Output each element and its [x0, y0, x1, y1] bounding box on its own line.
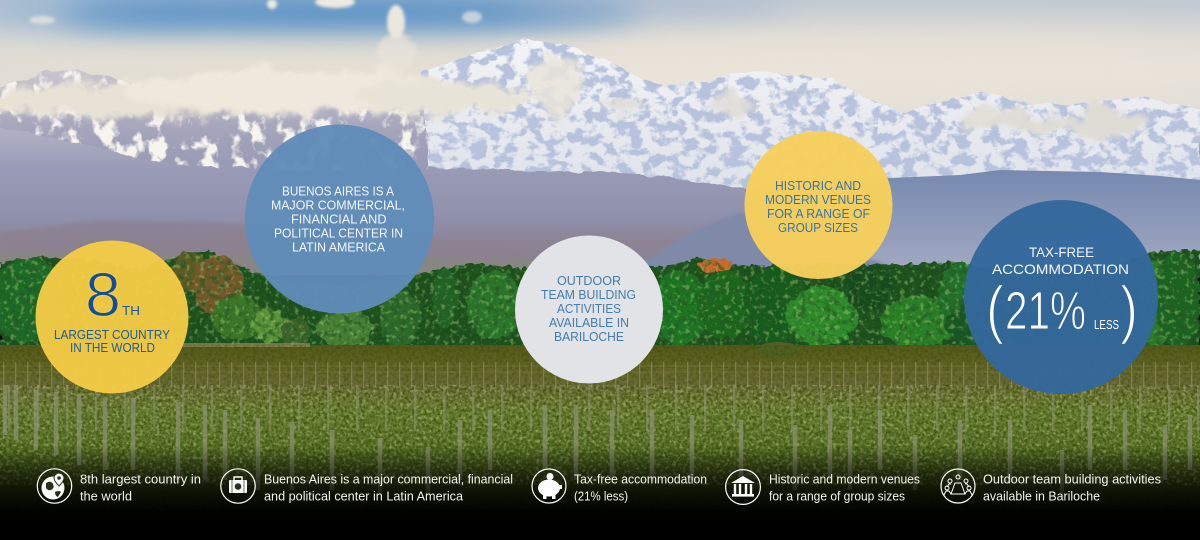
- caption: POLITICAL CENTER IN: [274, 226, 403, 240]
- caption: ACTIVITIES: [557, 302, 621, 316]
- circle: outdoor team building: [515, 236, 663, 384]
- label: Tax-free accommodation: [574, 472, 707, 486]
- 21% less figure: (: [986, 273, 1004, 345]
- label: for a range of group sizes: [769, 490, 905, 504]
- icon: piggy bank: [532, 469, 566, 503]
- caption: HISTORIC AND: [775, 179, 861, 193]
- caption: [271, 184, 405, 254]
- caption: LARGEST COUNTRY: [54, 328, 171, 342]
- label: [80, 472, 201, 504]
- 21% less figure: ): [1120, 273, 1138, 345]
- blue foothills: [640, 170, 1200, 270]
- caption: ACCOMMODATION: [992, 261, 1129, 277]
- caption: AVAILABLE IN: [549, 316, 629, 330]
- caption: [992, 244, 1129, 277]
- caption: TEAM BUILDING: [541, 288, 636, 302]
- main massif: [420, 38, 1200, 190]
- caption: TAX-FREE: [1029, 244, 1094, 260]
- feature: outdoor team building: [941, 469, 1161, 504]
- icon: team around a table: [941, 469, 975, 503]
- 21% less figure: LESS: [1094, 318, 1119, 332]
- icon: classical building: [726, 470, 760, 504]
- feature: Buenos Aires: [221, 469, 513, 504]
- caption: [54, 328, 171, 355]
- label: (21% less): [574, 490, 628, 504]
- feature: 8th largest country: [37, 469, 201, 504]
- label: available in Bariloche: [983, 490, 1100, 504]
- icon: globe with pin: [37, 469, 72, 503]
- label: and political center in Latin America: [264, 490, 463, 504]
- leaf texture: [0, 345, 1200, 510]
- icon: money suitcase: [221, 469, 255, 503]
- far mountain range: [0, 120, 1200, 275]
- label: [574, 472, 707, 504]
- snow-covered peaks: [0, 38, 1200, 190]
- label: 8th largest country in: [80, 472, 201, 486]
- label: Outdoor team building activities: [983, 472, 1161, 486]
- feature strip: [37, 469, 1161, 504]
- clouds over the peaks: [0, 34, 1152, 138]
- big number 8th: [85, 261, 140, 330]
- caption: FINANCIAL AND: [291, 212, 386, 226]
- caption: BARILOCHE: [554, 330, 624, 344]
- label: the world: [80, 490, 132, 504]
- feature: tax-free: [532, 469, 707, 504]
- caption: [765, 179, 871, 235]
- caption: MODERN VENUES: [765, 193, 871, 207]
- caption: GROUP SIZES: [778, 221, 858, 235]
- label: [769, 472, 920, 504]
- label: [264, 472, 513, 504]
- vine posts: [0, 362, 1200, 500]
- caption: LATIN AMERICA: [292, 240, 386, 254]
- circle: tax-free accommodation: [964, 200, 1158, 394]
- big number 8th: 8: [85, 261, 121, 330]
- circle: Buenos Aires: [245, 124, 434, 314]
- sky: [0, 0, 1200, 200]
- circle: historic venues: [744, 131, 892, 279]
- label: Historic and modern venues: [769, 472, 920, 486]
- 21% less figure: [986, 273, 1138, 345]
- label: Buenos Aires is a major commercial, financial: [264, 472, 513, 486]
- caption: BUENOS AIRES IS A: [282, 184, 395, 198]
- caption: IN THE WORLD: [70, 341, 155, 355]
- vineyard field: [0, 342, 1200, 520]
- big number 8th: TH: [122, 303, 140, 318]
- caption: FOR A RANGE OF: [767, 207, 870, 221]
- caption: [541, 274, 636, 344]
- dark fade at bottom: [0, 445, 1200, 540]
- left snowfield: [0, 70, 430, 170]
- tree line: [0, 245, 1200, 351]
- circle: 8th largest country: [36, 240, 188, 394]
- feature: historic venues: [726, 470, 920, 504]
- caption: MAJOR COMMERCIAL,: [271, 198, 405, 212]
- 21% less figure: 21%: [1005, 281, 1086, 341]
- caption: OUTDOOR: [557, 274, 621, 288]
- label: [983, 472, 1161, 504]
